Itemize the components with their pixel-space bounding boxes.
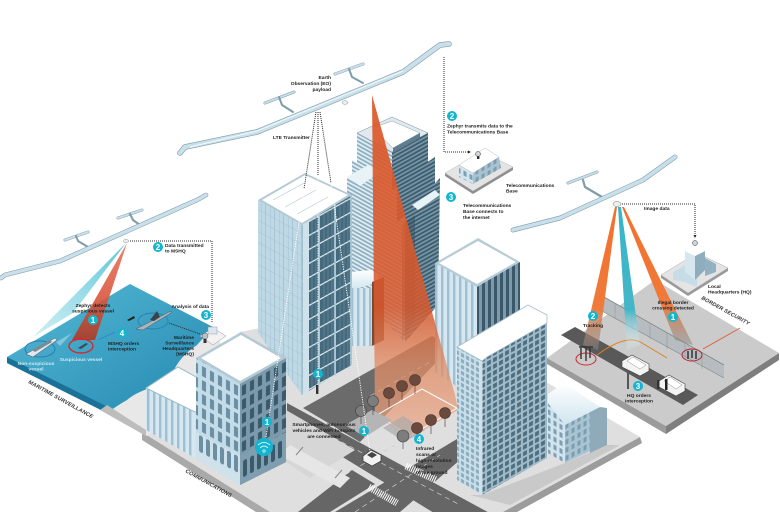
label: zephyr transmits: Zephyr transmits data to the bbox=[447, 124, 513, 130]
step 2 marker: zephyr transmits bbox=[447, 111, 457, 121]
label: maritime headquarters: (MSHQ) bbox=[176, 352, 194, 358]
label: tracking: Tracking bbox=[583, 323, 603, 329]
step 3 marker: HQ orders bbox=[633, 381, 643, 391]
border wall bbox=[597, 293, 724, 378]
patrol car 1 bbox=[622, 355, 649, 389]
label: connects to internet: the internet bbox=[463, 215, 490, 221]
autonomous car bbox=[363, 450, 381, 466]
panel: maritime surveillance bbox=[7, 243, 240, 436]
step 1 marker: building bbox=[262, 417, 272, 427]
step 1 marker: maritime: 1 bbox=[91, 316, 96, 325]
step 1 marker: building: 1 bbox=[265, 418, 270, 427]
tree row grey bbox=[356, 396, 409, 449]
label: connected devices: are connected bbox=[307, 434, 341, 440]
step 1 marker: border bbox=[668, 312, 678, 322]
tower: central stepped skyscraper bbox=[347, 117, 440, 342]
building: tall lattice tower bbox=[258, 173, 352, 395]
building: telecommunications base bbox=[445, 148, 513, 194]
label: payload: Earth bbox=[318, 76, 331, 81]
step 4 marker: infrared: 4 bbox=[417, 435, 422, 444]
label: MSHQ orders: interception bbox=[108, 346, 136, 352]
building: big front grid tower bbox=[457, 305, 547, 495]
link line bbox=[98, 332, 115, 340]
icon: wifi hotspot bbox=[255, 438, 273, 456]
step 2 marker: zephyr transmits: 2 bbox=[450, 112, 455, 121]
sea bbox=[7, 284, 213, 413]
step 2 marker: data transmitted bbox=[153, 242, 163, 252]
step 1 marker: car bbox=[359, 426, 369, 436]
land edge bbox=[100, 405, 146, 436]
label: data transmitted: to MSHQ bbox=[165, 248, 186, 254]
step 2 marker: data transmitted: 2 bbox=[156, 243, 161, 252]
label: non-suspicious vessel: Non-suspicious bbox=[18, 362, 54, 367]
beam: interception bbox=[618, 207, 640, 350]
label: maritime headquarters: Surveillance bbox=[165, 340, 194, 346]
label: zephyr detects: Zephyr detects bbox=[76, 304, 110, 309]
panel: communications city slab bbox=[142, 300, 642, 512]
step 1 marker: car: 1 bbox=[362, 427, 367, 436]
label: image data: Image data bbox=[644, 206, 670, 212]
step 3 marker: HQ orders: 3 bbox=[636, 382, 641, 391]
MSHQ station bbox=[200, 327, 226, 345]
step 1 marker: border: 1 bbox=[671, 313, 676, 322]
building: front tower with arches bbox=[196, 332, 286, 485]
step 1 marker: maritime bbox=[88, 315, 98, 325]
red marker line bbox=[703, 328, 740, 349]
suspicious vessel bbox=[69, 339, 93, 353]
heading: maritime surveillance: MARITIME SURVEILLANCE bbox=[27, 380, 94, 420]
arrow: image data link bbox=[622, 204, 696, 238]
plaza with benches bbox=[280, 410, 355, 488]
aircraft: maritime Zephyr bbox=[1, 195, 206, 278]
coast land bbox=[107, 327, 240, 436]
building: low left block bbox=[146, 367, 198, 458]
people crossing bbox=[682, 349, 702, 361]
label: non-suspicious vessel: vessel bbox=[29, 366, 44, 372]
label: analysis of data: Analysis of data bbox=[171, 304, 209, 310]
step 4 marker: maritime bbox=[117, 328, 127, 338]
label: infrared scans: images bbox=[416, 464, 433, 470]
label: connects to internet: Base connects to bbox=[463, 209, 504, 215]
park with trees bbox=[345, 374, 457, 449]
label: connected devices: vehicles and WiFi hotspots bbox=[292, 428, 356, 434]
beam: illegal crossing bbox=[622, 207, 693, 345]
patrol car 2 bbox=[657, 375, 685, 396]
road network bbox=[287, 336, 530, 512]
building: grey-blue block right of tower bbox=[435, 238, 520, 400]
step 2 marker: tracking bbox=[588, 311, 598, 321]
label: connected devices: Smartphones, autonomous bbox=[292, 423, 356, 428]
heading: communications: COMMUNICATIONS bbox=[184, 469, 233, 499]
step 1 marker: pedestrian: 1 bbox=[316, 370, 321, 379]
building: small right block bbox=[548, 383, 607, 463]
step 3 marker: analysis bbox=[201, 310, 211, 320]
label: HQ orders: HQ orders bbox=[627, 394, 651, 399]
label: LTE transmitter: LTE Transmitter bbox=[273, 135, 310, 141]
arrows: LTE dotted beams bbox=[266, 112, 370, 452]
crosswalks bbox=[369, 466, 436, 503]
warship bbox=[136, 311, 171, 330]
label: maritime headquarters: Headquarters bbox=[162, 346, 194, 352]
step 4 marker: maritime: 4 bbox=[120, 329, 125, 338]
step 3 marker: internet: 3 bbox=[449, 193, 454, 202]
aircraft: communications Zephyr bbox=[180, 44, 449, 153]
people tracked bbox=[576, 347, 596, 365]
label: suspicious vessel: Suspicious vessel bbox=[60, 357, 103, 363]
building: local headquarters bbox=[661, 240, 728, 296]
helicopter bbox=[127, 316, 135, 321]
non-suspicious vessel bbox=[25, 333, 72, 357]
arrow: maritime data link bbox=[130, 241, 212, 323]
orange track bbox=[597, 340, 667, 358]
label: illegal crossing: crossing detected bbox=[652, 306, 694, 312]
label: maritime headquarters: Maritime bbox=[174, 336, 194, 341]
label: telecommunications base: Base bbox=[506, 188, 518, 194]
label: infrared scans: high-resolution bbox=[416, 458, 452, 464]
building: small round block behind tower bbox=[350, 270, 384, 346]
label: payload: Observation (EO) bbox=[291, 81, 331, 87]
step 3 marker: internet bbox=[446, 192, 456, 202]
step 2 marker: tracking: 2 bbox=[591, 312, 596, 321]
label: connects to internet: Telecommunications bbox=[463, 204, 511, 209]
panel: border security bbox=[547, 207, 779, 434]
arrow: zephyr to telecom base bbox=[444, 57, 471, 154]
label: infrared scans: of the ground bbox=[416, 470, 448, 476]
heading: border security: BORDER SECURITY bbox=[700, 296, 751, 327]
label: telecommunications base: Telecommunications bbox=[506, 184, 554, 189]
step 1 marker: pedestrian bbox=[313, 369, 323, 379]
beam: teal non-suspicious bbox=[33, 243, 126, 337]
label: local HQ: Local bbox=[708, 285, 721, 290]
arrow: analysis to ship bbox=[169, 323, 200, 334]
label: illegal crossing: Illegal border bbox=[658, 301, 688, 306]
label: zephyr detects: suspicious vessel bbox=[72, 308, 115, 314]
aircraft: border Zephyr bbox=[513, 157, 675, 230]
step 3 marker: analysis: 3 bbox=[204, 311, 209, 320]
beam: tracking bbox=[583, 207, 617, 350]
step 4 marker: infrared bbox=[414, 434, 424, 444]
label: infrared scans: scans or bbox=[416, 452, 436, 458]
pedestrian bbox=[316, 385, 318, 394]
label: HQ orders: interception bbox=[625, 398, 653, 404]
label: MSHQ orders: MSHQ orders bbox=[108, 342, 139, 347]
beam: red suspicious bbox=[72, 243, 127, 340]
label: payload: payload bbox=[313, 87, 331, 93]
label: zephyr transmits: Telecommunications Base bbox=[447, 130, 509, 136]
arches bbox=[199, 435, 238, 473]
label: data transmitted: Data transmitted bbox=[165, 244, 204, 249]
border road bbox=[561, 327, 698, 405]
tree row brown bbox=[384, 374, 450, 441]
beam: infrared scan cone bbox=[372, 95, 458, 438]
label: local HQ: Headquarters (HQ) bbox=[708, 290, 752, 296]
label: infrared scans: Infrared bbox=[416, 447, 434, 452]
